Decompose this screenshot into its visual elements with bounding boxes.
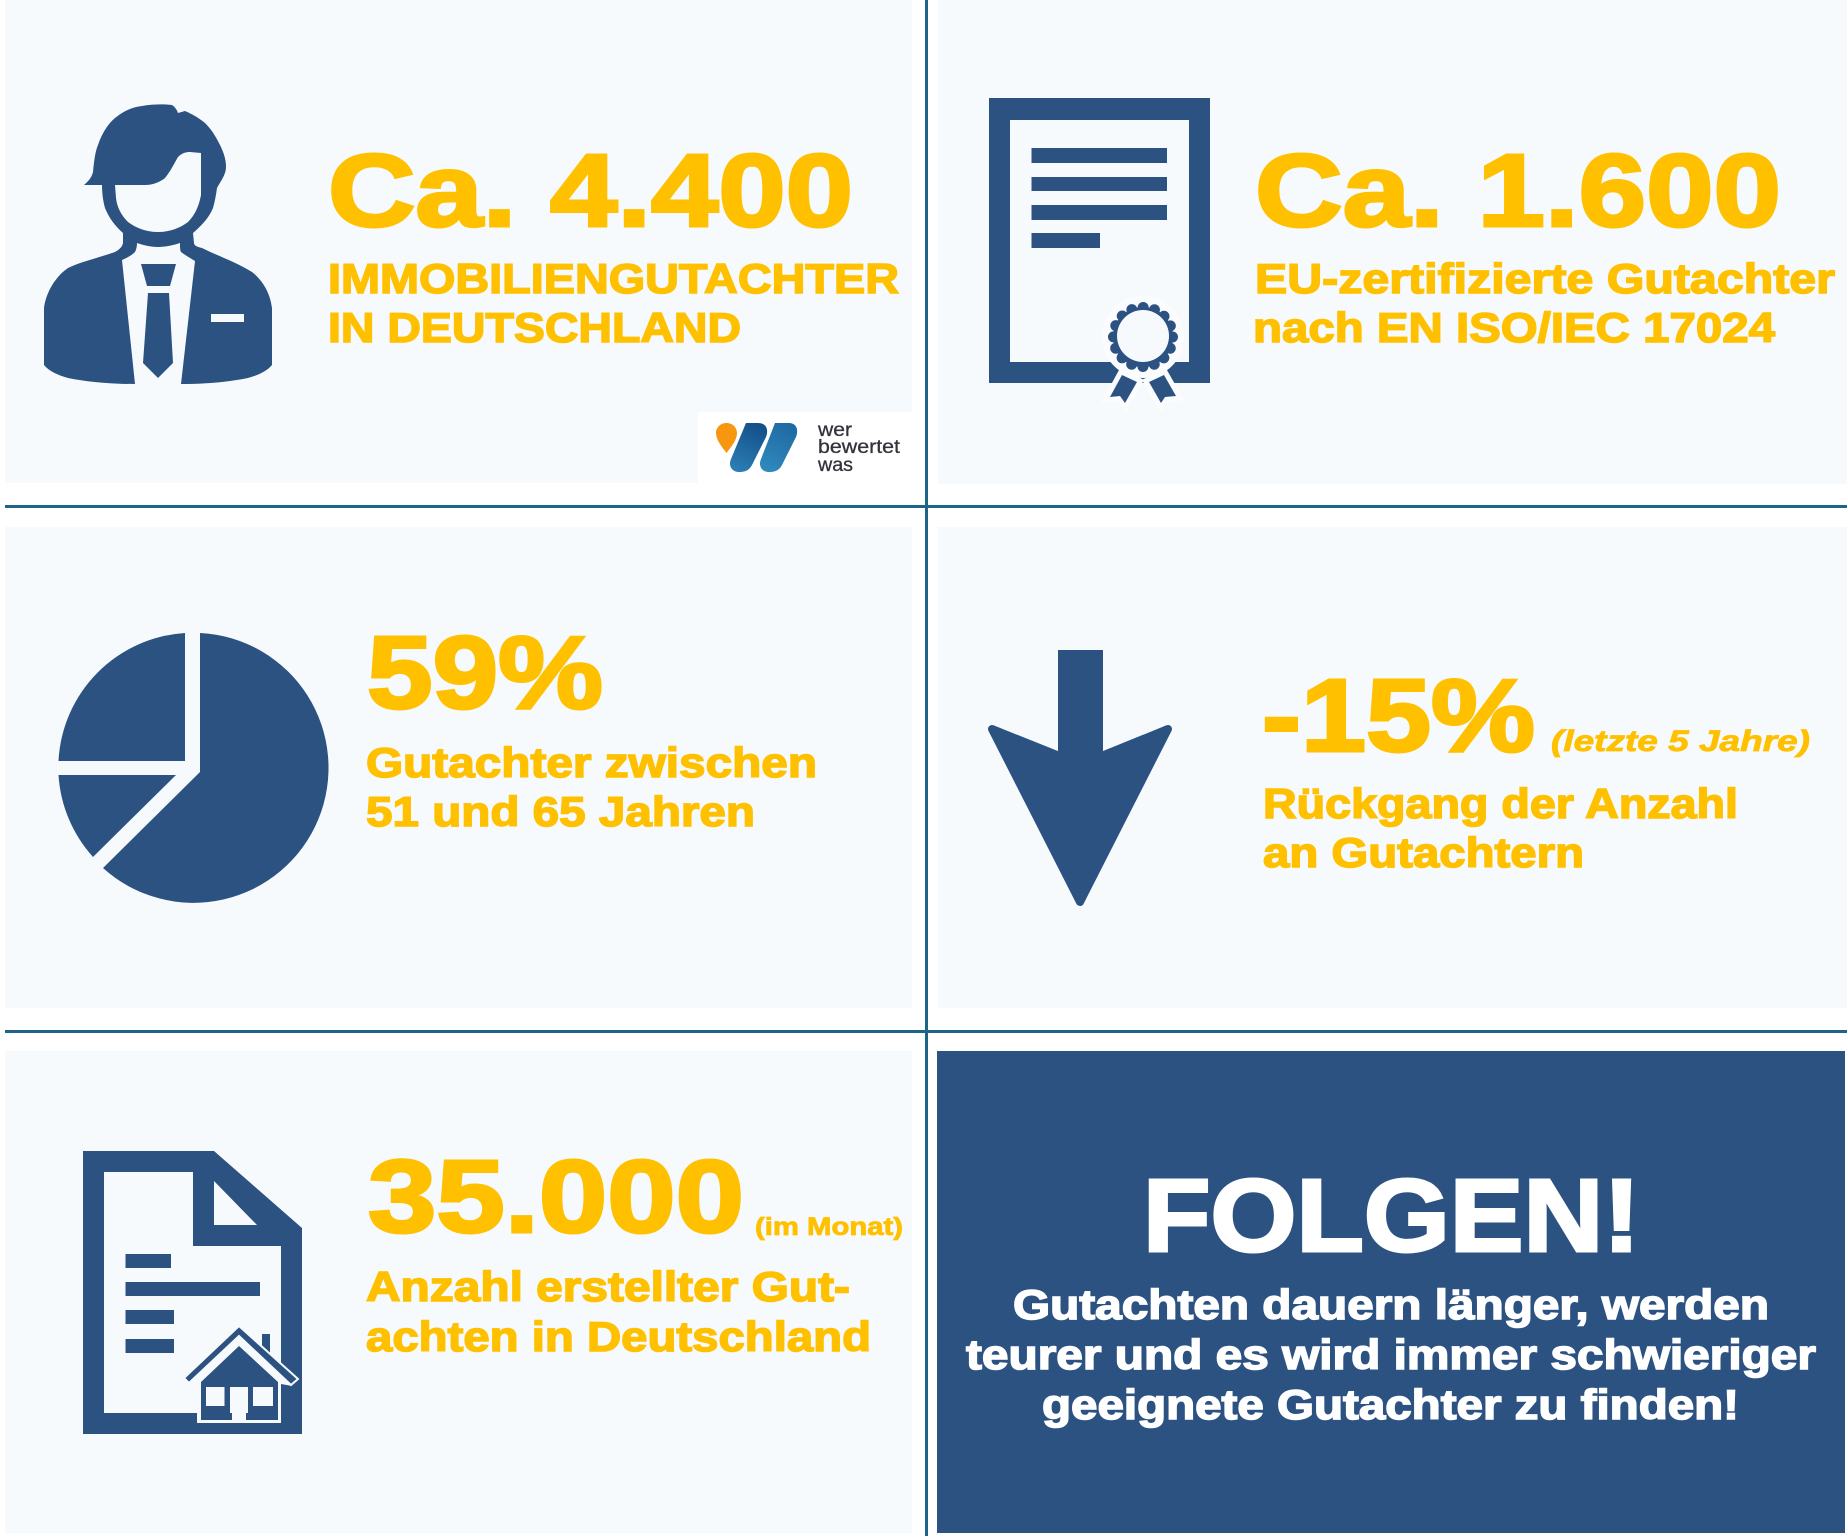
label: Gutachter zwischen 51 und 65 Jahren xyxy=(366,739,817,835)
stat: -15%: -15% xyxy=(1262,658,1535,773)
panel: Anzahl Gutachten 35.000 xyxy=(5,1051,912,1533)
label: Gutachter zwischen 51 und 65 Jahren: Gutachter zwischen xyxy=(366,739,817,786)
note: im Monat: (im Monat) xyxy=(755,1213,903,1241)
label: Immobiliengutachter in Deutschland: IMMOBILIENGUTACHTER xyxy=(328,255,899,302)
label: EU-zertifizierte Gutachter nach EN ISO/IEC 17024 xyxy=(1253,255,1835,351)
arrow: down xyxy=(992,650,1168,902)
label: EU-zertifizierte Gutachter nach EN ISO/IEC 17024: nach EN ISO/IEC 17024 xyxy=(1253,304,1776,351)
text: Folgen description: geeignete Gutachter zu finden! xyxy=(1042,1381,1739,1428)
icon: document with house xyxy=(83,1151,302,1434)
chart: pie xyxy=(58,633,329,903)
text: Folgen description: Gutachten dauern länger, werden xyxy=(1013,1281,1769,1328)
label: Anzahl erstellter Gutachten in Deutschland xyxy=(366,1263,871,1360)
label: Immobiliengutachter in Deutschland: IN DEUTSCHLAND xyxy=(328,304,741,351)
logo: wer bewertet was: was xyxy=(817,455,853,476)
heading: FOLGEN!: FOLGEN! xyxy=(1143,1158,1640,1273)
text: Folgen description: teurer und es wird immer schwieriger xyxy=(966,1331,1816,1378)
note: letzte 5 Jahre: (letzte 5 Jahre) xyxy=(1551,725,1810,758)
icon: certificate with rosette xyxy=(989,98,1210,403)
stat: Ca. 4.400: Ca. 4.400 xyxy=(328,133,853,248)
label: Gutachter zwischen 51 und 65 Jahren: 51 und 65 Jahren xyxy=(366,788,755,835)
panel: Immobiliengutachter xyxy=(5,0,912,483)
label: EU-zertifizierte Gutachter nach EN ISO/IEC 17024: EU-zertifizierte Gutachter xyxy=(1255,255,1835,302)
label: Anzahl erstellter Gutachten in Deutschland: achten in Deutschland xyxy=(366,1313,871,1360)
panel: EU-zertifizierte Gutachter xyxy=(938,0,1847,484)
label: Rückgang der Anzahl an Gutachtern xyxy=(1263,780,1738,876)
stat: 59%: 59% xyxy=(367,615,603,730)
logo: wer bewertet was: wer xyxy=(817,420,853,441)
panel: Folgen xyxy=(937,1051,1845,1533)
stat: Ca. 1.600: Ca. 1.600 xyxy=(1255,133,1781,248)
panel: Altersstruktur 59% xyxy=(5,527,912,1008)
text: Folgen description xyxy=(966,1281,1816,1428)
label: Immobiliengutachter in Deutschland xyxy=(328,255,899,351)
label: Anzahl erstellter Gutachten in Deutschland: Anzahl erstellter Gut- xyxy=(366,1263,850,1310)
panel: Rückgang -15% xyxy=(938,527,1847,1008)
label: Rückgang der Anzahl an Gutachtern: an Gutachtern xyxy=(1263,829,1584,876)
logo: wer bewertet was xyxy=(698,412,912,483)
logo: wer bewertet was: bewertet xyxy=(818,437,901,458)
icon: house xyxy=(184,1326,298,1423)
stat: 35.000: 35.000 xyxy=(368,1139,744,1254)
icon: person in suit xyxy=(44,104,272,384)
label: Rückgang der Anzahl an Gutachtern: Rückgang der Anzahl xyxy=(1263,780,1738,827)
